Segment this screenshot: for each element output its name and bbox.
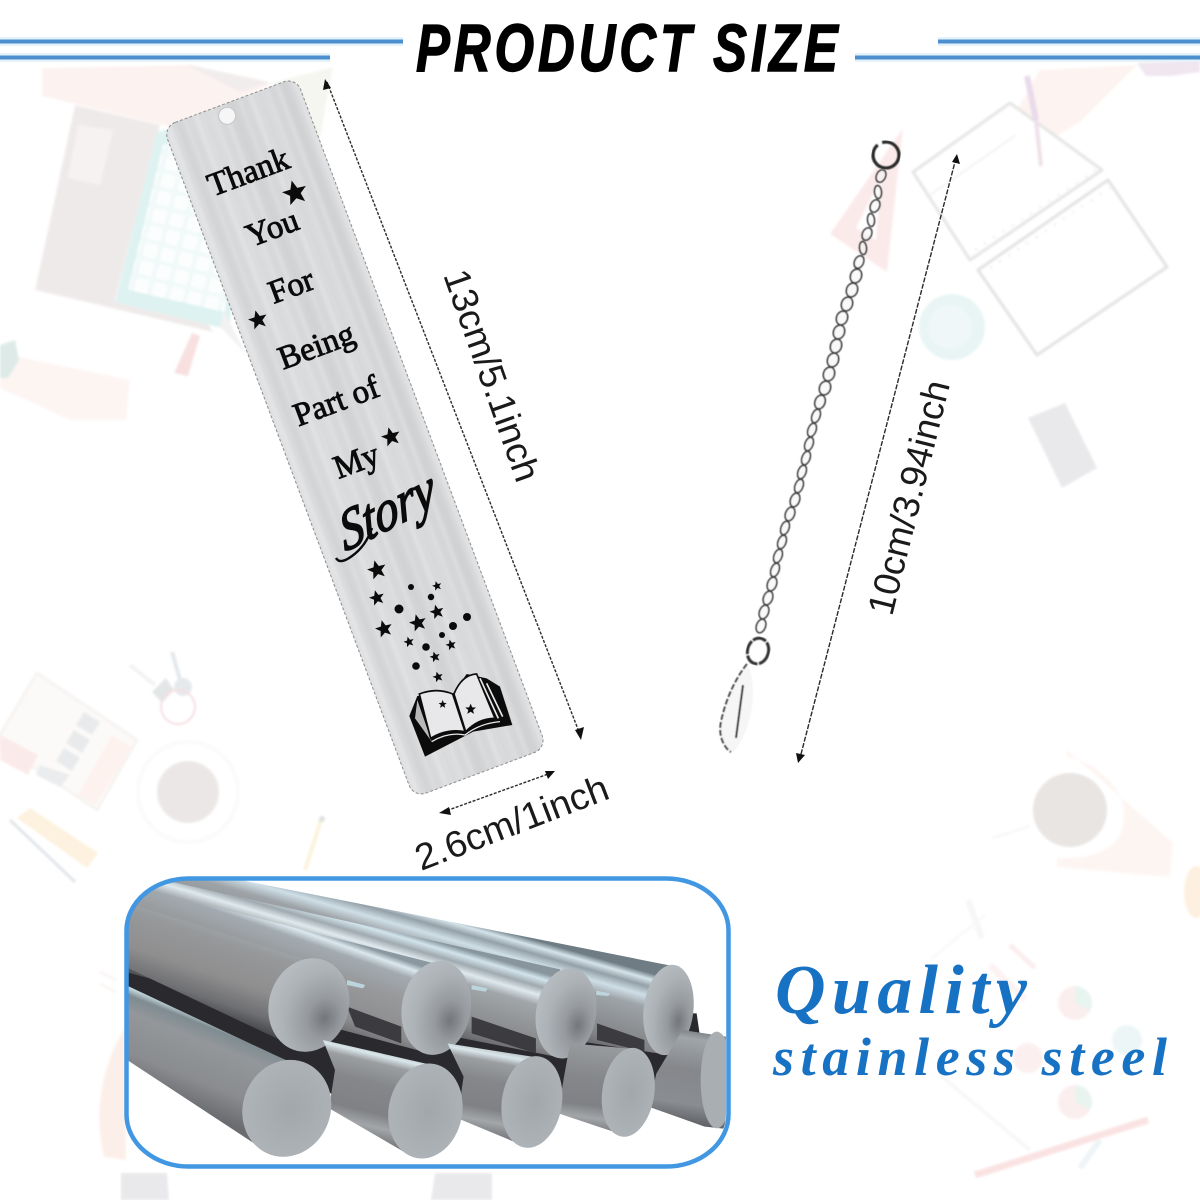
background: bottom-right cup, hand and stationery: [930, 750, 1200, 1175]
far rods: [174, 880, 670, 1055]
arrow: bookmark length: [323, 79, 584, 740]
caption: quality stainless steel: Quality: [775, 952, 1028, 1029]
bookmark plate: [163, 77, 547, 798]
bookmark engraved text: [203, 141, 441, 565]
chain jump ring: [871, 140, 901, 170]
bookmark engraved text: Thank: [203, 141, 295, 204]
background: bottom-left hand and grey items: [99, 972, 492, 1200]
steel rods photo: [118, 870, 737, 1162]
bookmark engraved text: Part of: [289, 369, 384, 434]
Story swash: [336, 528, 372, 561]
background: pink triangle ruler: [830, 128, 903, 272]
background: calculator, keys, cup, ruler, pencil: [0, 652, 325, 882]
arrow: bookmark width: [439, 771, 555, 815]
chain links: [754, 168, 888, 634]
arrow: chain length: [796, 154, 960, 763]
bookmark engraved text: You: [241, 202, 304, 255]
lower rods: [558, 1043, 628, 1136]
background: top-left laptop and hand: [0, 64, 333, 420]
icon: open book: [409, 674, 512, 757]
bookmark: [163, 77, 547, 798]
bookmark engraved text: My: [329, 437, 385, 487]
header rules: [0, 37, 1200, 62]
dimension label: 13cm/5.1inch: 13cm/5.1inch: [435, 264, 548, 487]
caption: quality stainless steel: [772, 952, 1167, 1087]
far right rod: [652, 1030, 726, 1129]
bookmark engraved text: For: [264, 262, 319, 312]
bookmark engraved text: Story: [334, 455, 441, 565]
background: top-right notebook, hand and phone: [913, 60, 1200, 488]
panel: stainless steel rods: [118, 870, 737, 1166]
bookmark engraved text: Being: [273, 316, 360, 377]
bookmark stars: [246, 177, 471, 683]
end faces upper row: [268, 958, 350, 1052]
title: PRODUCT SIZE: [416, 10, 840, 86]
panel frame: [126, 878, 728, 1166]
dimension label: 10cm/3.94inch: 10cm/3.94inch: [860, 376, 958, 619]
lower ring: [744, 636, 772, 666]
dimension label: 2.6cm/1inch: 2.6cm/1inch: [409, 767, 614, 878]
icon: feather charm: [720, 664, 753, 753]
caption: quality stainless steel: stainless steel: [772, 1027, 1167, 1087]
chain with feather charm: [720, 140, 901, 753]
